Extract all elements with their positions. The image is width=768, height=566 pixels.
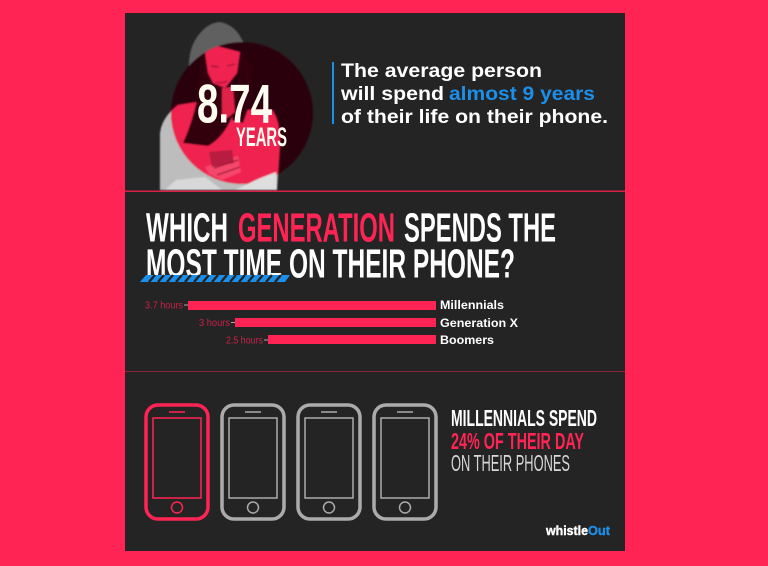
panel: hero section <box>160 22 608 190</box>
bar: generation x: Generation X <box>440 318 518 330</box>
text: 24% of their day: 24% OF THEIR DAY <box>451 428 584 454</box>
right hair <box>230 108 248 124</box>
eyes and smile <box>211 64 235 83</box>
heading: average person: of their life on their phone. <box>341 106 608 128</box>
bar: millennials: 3.7 hours <box>145 300 183 312</box>
sweater <box>160 102 280 190</box>
bar: millennials: Millennials <box>440 300 504 312</box>
panel: phones section <box>146 405 611 538</box>
panel: dark card <box>125 13 625 551</box>
face <box>205 45 240 88</box>
heading: which generation: SPENDS THE <box>404 204 556 250</box>
woman inside circle <box>170 45 282 185</box>
underline: hatched blue <box>140 275 290 282</box>
icon: phone grey 1 <box>222 405 284 519</box>
heading: which generation: WHICH <box>146 204 228 250</box>
logo: whistleOut: Out <box>588 523 611 538</box>
heading: average person: will spend <box>340 83 444 105</box>
circle <box>171 42 313 184</box>
bar chart <box>145 300 518 347</box>
logo: whistleOut <box>545 523 611 538</box>
fingers shadow <box>214 160 240 175</box>
divider accent <box>332 62 334 124</box>
bar: boomers: 2.5 hours <box>226 336 263 346</box>
body <box>170 101 282 185</box>
sweater bottom <box>165 177 222 190</box>
text: on their phones: ON THEIR PHONES <box>451 450 570 476</box>
icon: phone grey 3 <box>374 405 436 519</box>
heading: average person: The average person <box>341 60 542 82</box>
left hair <box>182 62 234 147</box>
heading: average person <box>340 60 608 128</box>
photo: woman looking at phone with red circle <box>160 22 313 190</box>
section divider <box>125 190 625 192</box>
bar: generation x: 3 hours <box>199 318 230 329</box>
heading: which generation <box>146 204 556 286</box>
heading: which generation: MOST TIME ON THEIR PHONE? <box>146 240 515 286</box>
section divider <box>125 371 625 372</box>
stat: YEARS: YEARS <box>236 122 287 152</box>
bar: boomers <box>226 335 494 347</box>
text: millennials spend: MILLENNIALS SPEND <box>451 405 597 431</box>
phone <box>209 150 234 167</box>
heading: which generation: GENERATION <box>238 204 395 250</box>
hair outside circle <box>189 22 250 90</box>
stat: 8.74: 8.74 <box>197 72 272 134</box>
neck <box>222 87 235 122</box>
bar: millennials <box>145 300 504 312</box>
logo: whistleOut: whistle <box>545 523 588 538</box>
panel: generation section <box>140 204 556 347</box>
icon: phone highlighted <box>146 405 208 519</box>
bar: generation x <box>199 318 518 330</box>
icon: phone grey 2 <box>298 405 360 519</box>
hands <box>205 156 241 180</box>
bar: boomers: Boomers <box>440 335 494 347</box>
heading: average person: almost 9 years <box>449 83 595 105</box>
